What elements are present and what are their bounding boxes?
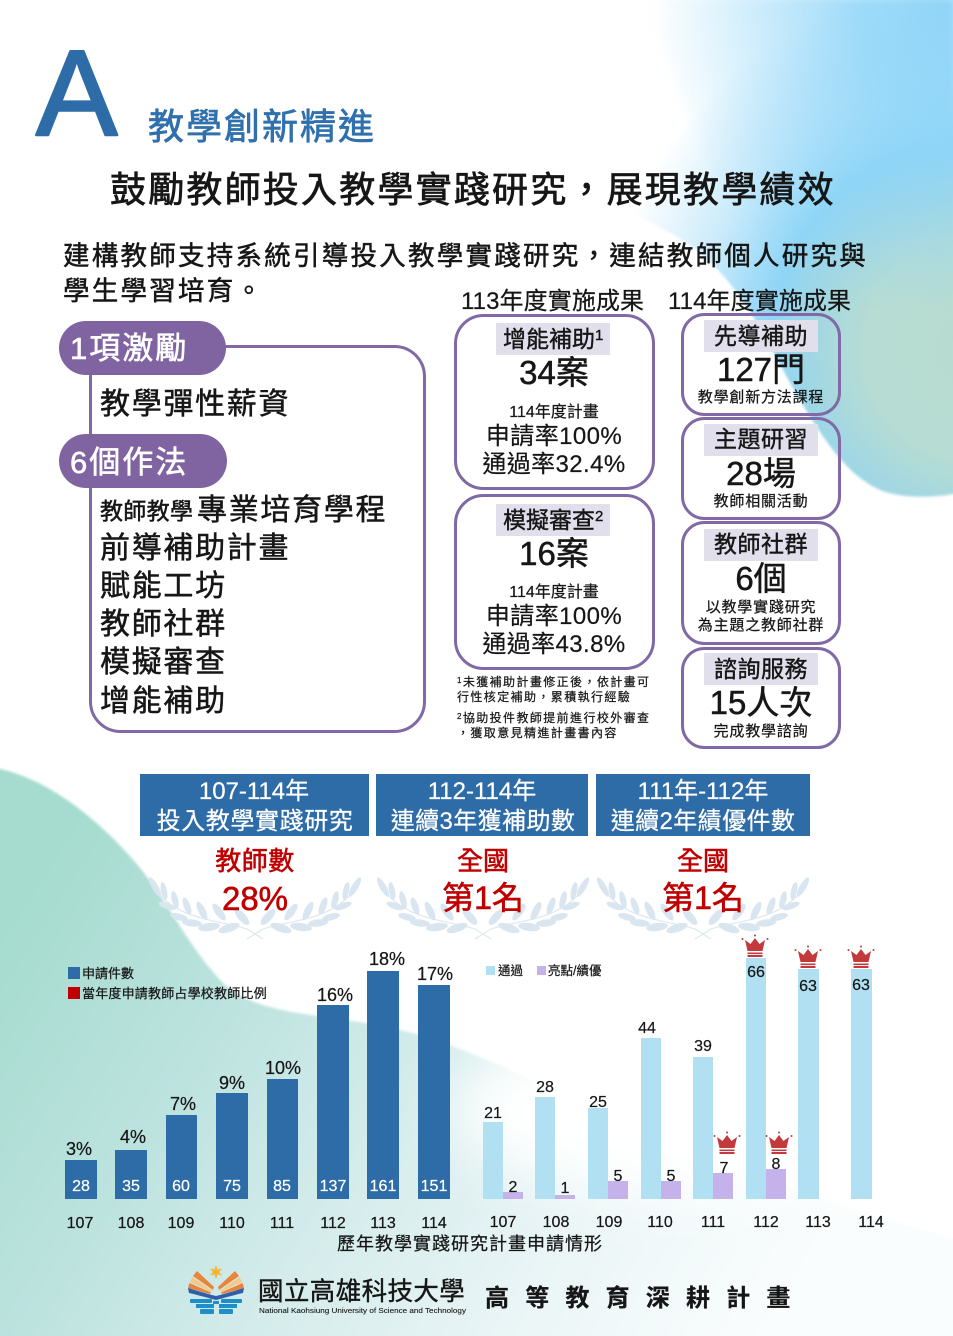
value labels: 151 — [421, 1178, 447, 1195]
list: practices: 模擬審查 — [100, 646, 227, 679]
card: mock review: 114年度計畫 — [509, 583, 599, 601]
percent labels: 17% — [417, 964, 453, 984]
project name: 高等教育深耕計畫 — [485, 1284, 807, 1312]
card: consulting — [682, 648, 840, 748]
laurel 1 — [147, 876, 363, 939]
approved labels: 63 — [799, 978, 817, 995]
stat: national rank 1 grants: 第1名 — [442, 880, 524, 916]
year axis: 112 — [320, 1215, 346, 1232]
bars: approved — [483, 958, 872, 1199]
banner: teachers in research: 107-114年 — [199, 778, 309, 805]
stat: national rank 1 grants — [442, 846, 524, 916]
year axis — [490, 1214, 884, 1231]
banner: 2 years excellent: 111年-112年 — [638, 778, 768, 805]
university name: National Kaohsiung University of Science and Technology — [259, 1306, 466, 1315]
card: capacity grant: 通過率32.4% — [482, 451, 626, 478]
card: mock review — [456, 496, 654, 668]
card: capacity grant — [456, 316, 654, 488]
value labels: 60 — [172, 1178, 190, 1195]
text: incentive item: 教學彈性薪資 — [100, 388, 290, 421]
footnotes — [457, 674, 650, 740]
year axis: 107 — [67, 1215, 93, 1232]
card: consulting: 15人次 — [710, 684, 812, 721]
list: practices: 前導補助計畫 — [100, 532, 290, 565]
year axis: 108 — [118, 1215, 144, 1232]
year axis: 110 — [219, 1215, 245, 1232]
pill: 6 practices: 6個作法 — [70, 445, 188, 480]
panel: incentives and practices — [59, 321, 424, 732]
crown icon 112 highlight — [766, 1132, 792, 1154]
section title: 教學創新精進 — [148, 106, 376, 147]
banner: teachers in research — [140, 774, 369, 836]
year axis: 109 — [168, 1215, 194, 1232]
value labels: 161 — [370, 1178, 396, 1195]
description text — [63, 241, 868, 306]
list: practices: 賦能工坊 — [100, 570, 227, 603]
card: teacher community: 教師社群 — [714, 531, 808, 557]
year axis: 109 — [596, 1214, 622, 1231]
legend: approvals: 通過 — [498, 963, 524, 978]
card: pilot grant — [682, 314, 840, 414]
footnotes: 1 — [457, 676, 463, 685]
percent labels: 7% — [170, 1094, 196, 1114]
list: practices: 增能補助 — [100, 685, 227, 718]
footnotes: 協助投件教師提前進行校外審查 — [463, 710, 650, 725]
stat: teacher share 28%: 教師數 — [215, 846, 295, 876]
pill: 6 practices — [59, 434, 227, 488]
legend: approvals — [486, 963, 601, 978]
value labels: 28 — [72, 1178, 90, 1195]
highlight labels — [509, 1156, 781, 1197]
banner: 3 years grants: 112-114年 — [428, 778, 536, 805]
heading: 114 results: 114年度實施成果 — [668, 288, 851, 315]
approved labels: 39 — [694, 1038, 712, 1055]
banner: 3 years grants: 連續3年獲補助數 — [391, 808, 575, 835]
background: bottom left gradient blob — [0, 768, 953, 1336]
card: teacher community: 以教學實踐研究 — [706, 598, 816, 616]
card: mock review: 2 — [595, 508, 603, 525]
percent labels: 9% — [219, 1073, 245, 1093]
crown icon 113 — [794, 946, 822, 968]
approved labels: 21 — [484, 1105, 502, 1122]
percent labels: 16% — [317, 985, 353, 1005]
bars: highlights — [503, 1169, 786, 1199]
card: mock review: 模擬審查 — [503, 507, 595, 533]
stat: national rank 1 grants: 全國 — [457, 846, 509, 876]
highlight labels: 7 — [720, 1160, 729, 1177]
year axis: 114 — [858, 1214, 884, 1231]
footnotes: ，獲取意見精進計畫書內容 — [457, 725, 618, 740]
background: top right gradient blob — [520, 0, 953, 497]
heading: 113 results: 113年度實施成果 — [461, 288, 644, 315]
approved labels: 25 — [589, 1094, 607, 1111]
stat: national rank 1 excellence — [662, 846, 744, 916]
description text: 學生學習培育。 — [63, 276, 264, 306]
card: consulting: 完成教學諮詢 — [714, 722, 808, 740]
card: teacher community: 為主題之教師社群 — [698, 617, 824, 634]
percent labels: 18% — [369, 949, 405, 969]
list: practices: 專業培育學程 — [197, 494, 387, 527]
card: themed workshops: 主題研習 — [714, 426, 808, 452]
card: themed workshops — [682, 418, 840, 518]
year axis: 111 — [270, 1215, 294, 1232]
bars: applications — [65, 971, 450, 1199]
chart caption: 歷年教學實踐研究計畫申請情形 — [337, 1234, 603, 1254]
laurel 2 — [375, 876, 591, 939]
card: capacity grant: 申請率100% — [486, 423, 622, 450]
approved labels: 44 — [638, 1020, 656, 1037]
approved labels: 28 — [536, 1079, 554, 1096]
year axis: 108 — [543, 1214, 569, 1231]
card: themed workshops: 教師相關活動 — [714, 493, 808, 510]
card: mock review: 16案 — [519, 535, 589, 572]
footnotes: 未獲補助計畫修正後，依計畫可 — [463, 674, 650, 689]
year axis: 107 — [490, 1214, 516, 1231]
stat: national rank 1 excellence: 第1名 — [662, 880, 744, 916]
card: pilot grant: 先導補助 — [714, 323, 808, 349]
card: consulting: 諮詢服務 — [714, 656, 808, 682]
percent labels: 3% — [66, 1139, 92, 1159]
description text: 建構教師支持系統引導投入教學實踐研究，連結教師個人研究與 — [63, 241, 868, 271]
approved labels: 66 — [747, 964, 765, 981]
legend: applications — [68, 966, 267, 1001]
banner: 2 years excellent — [596, 774, 810, 836]
card: teacher community: 6個 — [735, 560, 787, 597]
pill: 1 incentive — [59, 321, 226, 375]
year axis: 113 — [370, 1215, 396, 1232]
footnotes: 2 — [457, 712, 463, 721]
card: mock review: 通過率43.8% — [482, 631, 626, 658]
card: capacity grant: 1 — [595, 327, 603, 344]
highlight labels: 5 — [667, 1168, 676, 1185]
section letter A: A — [36, 25, 118, 161]
approved labels — [484, 964, 870, 1122]
card: themed workshops: 28場 — [726, 455, 796, 492]
card: pilot grant: 127門 — [717, 351, 805, 388]
year axis: 114 — [421, 1215, 447, 1232]
stat: teacher share 28%: 28% — [222, 880, 288, 917]
card: capacity grant: 增能補助 — [503, 326, 595, 352]
stat: national rank 1 excellence: 全國 — [677, 846, 729, 876]
percent labels — [66, 949, 453, 1159]
highlight labels: 1 — [561, 1180, 570, 1197]
card: capacity grant: 34案 — [519, 354, 589, 391]
highlight labels: 2 — [509, 1179, 518, 1196]
crown icon 111 highlight — [714, 1132, 740, 1154]
footnotes: 行性核定補助，累積執行經驗 — [457, 689, 631, 704]
year axis — [67, 1215, 447, 1232]
university name: 國立高雄科技大學 — [258, 1278, 465, 1306]
year axis: 112 — [753, 1214, 779, 1231]
bar chart: applications — [65, 949, 453, 1232]
value labels: 137 — [320, 1178, 346, 1195]
banner: 2 years excellent: 連續2年績優件數 — [611, 808, 795, 835]
legend: applications: 申請件數 — [82, 966, 134, 981]
card: mock review: 申請率100% — [486, 603, 622, 630]
percent labels: 10% — [265, 1058, 301, 1078]
pill: 1 incentive: 1項激勵 — [70, 331, 188, 366]
bar chart: approvals — [483, 934, 884, 1231]
list: practices: 教師教學 — [100, 498, 193, 524]
legend: approvals: 亮點/績優 — [548, 963, 601, 978]
list: practices — [100, 494, 387, 718]
banner: teachers in research: 投入教學實踐研究 — [157, 808, 353, 835]
crown icon 114 — [848, 946, 874, 968]
year axis: 110 — [647, 1214, 673, 1231]
main heading: 鼓勵教師投入教學實踐研究，展現教學績效 — [110, 169, 836, 210]
list: practices: 教師社群 — [100, 608, 227, 641]
laurel 3 — [595, 876, 811, 939]
legend: applications: 當年度申請教師占學校教師比例 — [82, 986, 267, 1001]
highlight labels: 5 — [614, 1168, 623, 1185]
university logo icon — [188, 1265, 244, 1314]
banner: 3 years grants — [376, 774, 588, 836]
value labels: 85 — [273, 1178, 291, 1195]
highlight labels: 8 — [772, 1156, 781, 1173]
year axis: 111 — [701, 1214, 725, 1231]
approved labels: 63 — [852, 977, 870, 994]
value labels: 35 — [122, 1178, 140, 1195]
card: teacher community — [682, 522, 840, 644]
card: pilot grant: 教學創新方法課程 — [698, 388, 824, 406]
year axis: 113 — [805, 1214, 831, 1231]
value labels: 75 — [223, 1178, 241, 1195]
crown icon 112 — [742, 934, 768, 957]
percent labels: 4% — [120, 1127, 146, 1147]
stat: teacher share 28% — [215, 846, 295, 917]
value labels — [72, 1178, 447, 1195]
card: capacity grant: 114年度計畫 — [509, 403, 599, 421]
